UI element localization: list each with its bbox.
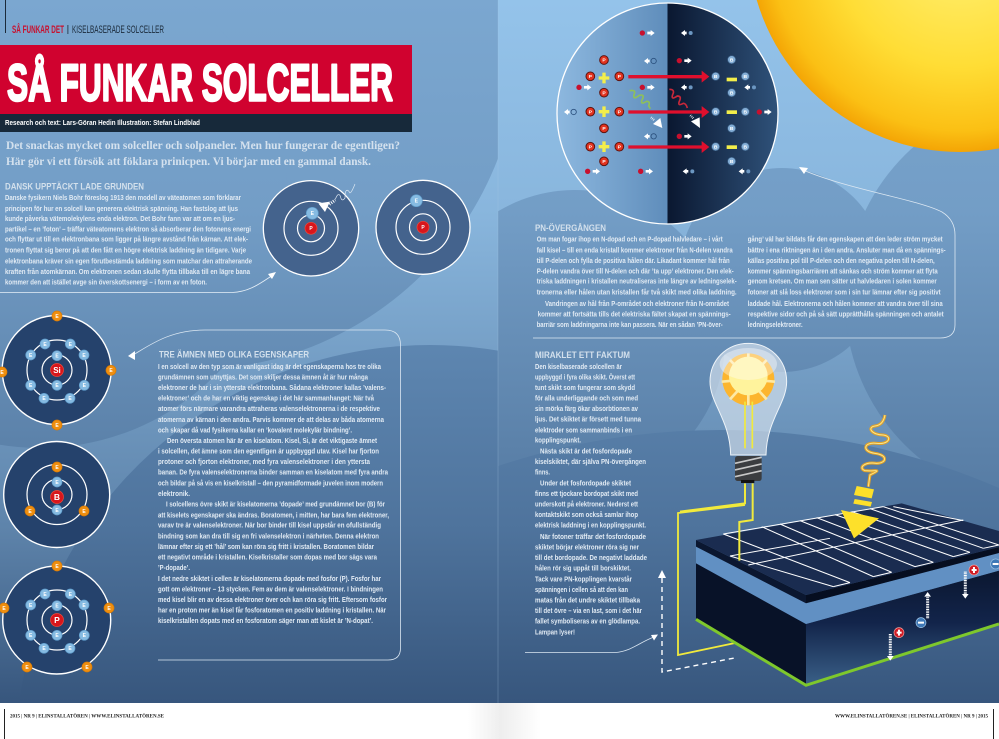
moving electrons: [576, 30, 772, 174]
B acceptor atoms: B: [744, 74, 748, 80]
text block: Tre ämnen: I det nedre skiktet i cellen är kiselatomerna dopade med fosfor (P). Fosfor har: [158, 574, 381, 583]
blue layer: [696, 547, 806, 624]
light bulb: [680, 343, 787, 512]
photon arrowheads: [651, 115, 700, 128]
text block: Dansk upptäckt: partikel – en ’foton’ – träffar väteatomens elektron så absorberar den fotonens energi: [5, 225, 251, 234]
B acceptor atoms: B: [714, 74, 718, 80]
P donor atoms: P: [589, 144, 593, 150]
text block: PN-övergången: kommer spänningsbarriären att sänkas och ström kommer att flyta: [748, 266, 938, 275]
arrow: Bohr text to atom: [0, 272, 276, 292]
text block: Tre ämnen: bindning som kan dra till sig en fri valenselektron i närheten. Denna elektron: [158, 531, 379, 540]
text block: Tre ämnen: atomerna av kärnan i den andra. Parvis kommer de att delas av båda atomerna: [158, 415, 385, 424]
byline bar: [0, 114, 412, 132]
text block: Tre ämnen: I solcellens övre skikt är kiselatomerna ’dopade’ med grundämnet bor (B) för: [166, 500, 385, 509]
text block: Dansk upptäckt: elektronbana kräver sin egen förutbestämda laddning som matchar den attraherande: [5, 256, 253, 265]
text block: Dansk upptäckt: principen för hur en solcell kan generera elektrisk spänning. Han fastslog att ljus: [5, 204, 238, 213]
intro text: Här gör vi ett försök att föklara prinicpen. Vi börjar med en gammal dansk.: [6, 154, 371, 168]
section tag: SÅ FUNKAR DET: [12, 23, 64, 36]
atom: phosphorus: E: [25, 665, 29, 671]
atom: phosphorus: E: [55, 633, 59, 639]
text block: Tre ämnen: elektronik.: [158, 489, 190, 498]
text block: Miraklet ett faktum: MIRAKLET ETT FAKTUM: [535, 350, 630, 361]
atom: phosphorus: E: [29, 633, 33, 639]
atom: phosphorus: E: [68, 646, 72, 652]
photon waves: [629, 89, 687, 109]
text block: PN-övergången: [535, 223, 946, 329]
atom: phosphorus: E: [69, 592, 73, 598]
P donor atoms: P: [618, 144, 622, 150]
text block: PN-övergången: PN-ÖVERGÅNGEN: [535, 223, 606, 234]
atom: phosphorus: P: [54, 615, 60, 625]
section tag: KISELBASERADE SOLCELLER: [72, 24, 164, 36]
P donor atoms: P: [589, 109, 593, 115]
solar cell block: [696, 483, 999, 685]
atom: phosphorus: E: [82, 603, 86, 609]
atom: phosphorus: E: [83, 633, 87, 639]
text block: Dansk upptäckt: kommer den att istället avge sin överskottsenergi – i form av en foton.: [5, 278, 207, 287]
atom: silicon: E: [68, 396, 72, 402]
panel outline: three substances: [128, 330, 400, 660]
wire to lamp: left circuit: [678, 505, 745, 655]
text block: PN-övergången: barriär som laddningarna inte kan passera. När en sådan ’PN-över-: [537, 320, 723, 329]
glow: [720, 348, 777, 405]
text block: Miraklet ett faktum: spänningen i cellen så att den kan: [535, 585, 628, 594]
dashed current arrow: [658, 570, 737, 672]
atom: hydrogen ground state: E: [415, 199, 419, 205]
glass: [710, 343, 787, 455]
B acceptor atoms: B: [730, 90, 734, 96]
text block: Miraklet ett faktum: hålen rör sig uppåt till borskiktet.: [535, 564, 631, 573]
text block: Dansk upptäckt: kunde påverka vätemolekylens enda elektron. Det Bohr fann var att om en ljus-: [5, 214, 235, 223]
green contact layer: [696, 619, 999, 685]
text block: Miraklet ett faktum: Lampan lyser!: [535, 627, 575, 636]
B acceptor atoms: B: [714, 109, 718, 115]
text block: Dansk upptäckt: DANSK UPPTÄCKT LADE GRUNDEN: [5, 182, 144, 192]
atom: phosphorus: E: [43, 592, 47, 598]
atom: silicon: E: [0, 370, 4, 376]
atom: silicon: E: [55, 423, 59, 429]
text block: Tre ämnen: att kiselets egenskaper ska ändras. Boratomen, i mitten, har bara fem elektroner,: [158, 510, 389, 519]
text block: Dansk upptäckt: och flyttar ut till en elektronbana som ligger på längre avstånd från kärnan. Att elek-: [5, 235, 248, 244]
atom: hydrogen excited by photon: E: [311, 211, 315, 217]
text block: PN-övergången: laddade hål. Elektronerna och hålen kommer att vandra över till sina: [748, 299, 943, 308]
text block: Miraklet ett faktum: Den kiselbaserade solcellen är: [535, 362, 622, 371]
B acceptor atoms: B: [744, 144, 748, 150]
text block: Dansk upptäckt: [5, 182, 253, 287]
atom: phosphorus: E: [85, 665, 89, 671]
text block: Tre ämnen: och skapar då vad fysikerna kallar en ’kovalent molekylär bindning’.: [158, 425, 352, 434]
text block: Miraklet ett faktum: underskott på elektroner. Nederst ett: [535, 500, 638, 509]
atom: boron: B: [54, 492, 60, 502]
P donor atoms: P: [602, 58, 606, 64]
text block: Miraklet ett faktum: elektroder som sammanbinds i en: [535, 425, 632, 434]
atom: hydrogen excited by photon: [263, 181, 359, 276]
B acceptor atoms: B: [714, 144, 718, 150]
atom: phosphorus: E: [55, 604, 59, 610]
text block: PN-övergången: bättre i ena riktningen än i den andra. Ansluter man då en spännings-: [748, 245, 946, 254]
atom: boron: E: [82, 509, 86, 515]
text block: Miraklet ett faktum: för alla underliggande och som med: [535, 394, 638, 403]
footer strip: 2015 | NR 9 | ELINSTALLATÖREN | WWW.ELINSTALLATÖREN.SE: [10, 712, 164, 720]
text block: Tre ämnen: banan. De fyra valenselektronerna binder samman en kiselatom med fyra andra: [158, 468, 389, 477]
text block: Miraklet ett faktum: fallet symboliseras av en glödlampa.: [535, 616, 640, 625]
atom: hydrogen ground state: [376, 180, 470, 274]
text block: Miraklet ett faktum: matas från det undre skiktet tillbaka: [535, 595, 641, 604]
text block: Miraklet ett faktum: uppbyggd i fyra olika skikt. Överst ett: [535, 372, 635, 381]
text block: Tre ämnen: varav tre är valenselektroner. När bor binder till kisel uppstår en ofullständig: [158, 521, 381, 530]
text block: Tre ämnen: och bildar på så vis en kiselkristall – den pyramidformade juvelen inom modern: [158, 479, 383, 488]
P donor atoms: P: [618, 74, 622, 80]
text block: Tre ämnen: grundämnen som utnyttjas. Det som skiljer dessa ämnen åt är hur många: [158, 373, 369, 382]
atom: phosphorus: [0, 561, 114, 674]
text block: PN-övergången: respektive sidor och på så sätt upprätthålla spänningen och antalet: [748, 309, 944, 318]
byline bar: Research och text: Lars-Göran Hedin Illustration: Stefan Lindblad: [5, 118, 200, 127]
text block: Miraklet ett faktum: tunt skikt som fungerar som skydd: [535, 383, 635, 392]
atom: silicon: E: [82, 353, 86, 359]
text block: PN-övergången: tronerna eller hålen utan kristallen får två skikt med olika laddning.: [537, 287, 737, 296]
text block: Miraklet ett faktum: Under det fosfordopade skiktet: [540, 479, 631, 488]
atom: boron: E: [55, 480, 59, 486]
atom: silicon: E: [55, 354, 59, 360]
text block: Miraklet ett faktum: kontaktskikt som också samlar ihop: [535, 510, 638, 519]
text block: PN-övergången: Om man fogar ihop en N-dopad och en P-dopad halvledare – i vårt: [537, 235, 723, 244]
B acceptor atoms: [712, 56, 749, 165]
text block: PN-övergången: ledningselektroner.: [748, 320, 803, 329]
text block: Miraklet ett faktum: När fotoner träffar det fosfordopade: [540, 532, 647, 541]
atom: silicon: [0, 311, 116, 430]
text block: Miraklet ett faktum: Tack vare PN-kopplingen kvarstår: [535, 574, 632, 583]
atom: boron: E: [28, 509, 32, 515]
text block: Tre ämnen: protoner och fjorton elektroner, med fyra valenselektroner i den yttersta: [158, 457, 371, 466]
filament wires: [745, 402, 752, 448]
text block: Tre ämnen: ’P-dopade’.: [158, 563, 190, 572]
text block: Tre ämnen: TRE ÄMNEN MED OLIKA EGENSKAPER: [159, 350, 309, 360]
P donor atoms: P: [618, 109, 622, 115]
text block: Tre ämnen: elektroner’ och de har en viktig egenskap i det här sammanhanget: När två: [158, 394, 375, 403]
text block: Tre ämnen: I en solcell av den typ som är vanligast idag är det egenskaperna hos tre olika: [158, 362, 382, 371]
top edge: [696, 540, 806, 603]
red junction arrows: [628, 71, 709, 153]
charge carriers: [887, 559, 999, 661]
text block: Miraklet ett faktum: kiselskiktet, där själva PN-övergången: [535, 457, 646, 466]
text block: PN-övergången: till P-delen och fylla de positiva hålen där. Likadant kommer hål från: [537, 256, 730, 265]
minus signs: [727, 78, 737, 149]
lower left face: [696, 563, 806, 685]
text block: Dansk upptäckt: Danske fysikern Niels Bohr föreslog 1913 den modell av väteatomen som förklarar: [5, 193, 241, 202]
section tag: [5, 0, 164, 36]
atom: hydrogen ground state: P: [421, 225, 425, 231]
text block: PN-övergången: P-delen vandra över till N-delen och där ’ta upp’ elektroner. Den elek-: [537, 266, 734, 275]
atom: phosphorus: E: [55, 564, 59, 570]
PN junction diagram: [557, 3, 778, 224]
B acceptor atoms: B: [730, 57, 734, 63]
P donor atoms: P: [589, 74, 593, 80]
text block: PN-övergången: kommer att fortsätta tills det elektriska fältet skapat en spännings-: [538, 309, 731, 318]
atom: phosphorus: E: [29, 603, 33, 609]
atom: boron: E: [55, 508, 59, 514]
atom: silicon: E: [29, 353, 33, 359]
atom: silicon: E: [55, 314, 59, 320]
footer strip: [0, 703, 999, 739]
text block: Tre ämnen: elektroner de har i sin yttersta elektronbana. Sådana elektroner kallas ’valens-: [158, 383, 386, 392]
text block: Tre ämnen: lämnar efter sig ett ’hål’ som kan röra sig fritt i kristallen. Boratomen bildar: [158, 542, 374, 551]
atom: silicon: E: [42, 396, 46, 402]
arrow: text to circuit: [525, 634, 658, 652]
text block: Miraklet ett faktum: Nästa skikt är det fosfordopade: [540, 447, 633, 456]
P donor atoms: [586, 56, 624, 166]
text block: Dansk upptäckt: kraften från atomkärnan. Om elektronen sedan skulle flytta tillbaka till en lägre bana: [5, 267, 251, 276]
B acceptor atoms: B: [730, 126, 734, 132]
text block: PN-övergången: källas positiva pol till P-delen och den negativa polen till N-delen,: [748, 256, 935, 265]
text block: PN-övergången: Vandringen av hål från P-området och elektroner från N-området: [545, 299, 729, 308]
text block: Tre ämnen: gott om elektroner – 13 stycken. Fem av dem är valenselektroner. I bindningen: [158, 585, 383, 594]
text block: Miraklet ett faktum: ljus. Det skiktet är försett med tunna: [535, 415, 642, 424]
arrow: sun to PN panel outline: [533, 167, 955, 338]
atom: boron: [4, 442, 110, 548]
atom: phosphorus: E: [42, 646, 46, 652]
text block: Miraklet ett faktum: finns ett tjockare bordopat skikt med: [535, 489, 638, 498]
atom: hydrogen excited by photon: P: [309, 226, 313, 232]
text block: Tre ämnen: i solcellen, det ämne som den egentligen är uppbyggd utav. Kisel har fjorton: [158, 446, 379, 455]
text block: Miraklet ett faktum: sin mörka färg ökar absorbtionen av: [535, 404, 639, 413]
B acceptor atoms: B: [730, 159, 734, 165]
footer strip: WWW.ELINSTALLATÖREN.SE | ELINSTALLATÖREN | NR 9 | 2015: [835, 712, 988, 720]
text block: Dansk upptäckt: tronen flyttat sig beror på att den fått en högre elektrisk laddning än tidigare. Varje: [5, 246, 247, 255]
text block: Miraklet ett faktum: kopplingspunkt.: [535, 436, 581, 445]
atom: phosphorus: E: [2, 606, 6, 612]
text block: Miraklet ett faktum: till det övre – via en last, som i det här: [535, 606, 642, 615]
atom: silicon: E: [43, 342, 47, 348]
title banner: [0, 45, 412, 114]
text block: Miraklet ett faktum: [535, 350, 648, 636]
atom: phosphorus: E: [107, 606, 111, 612]
atom: silicon: E: [29, 383, 33, 389]
photon arrow: [841, 415, 889, 538]
atom: silicon: E: [69, 342, 73, 348]
text block: Tre ämnen: ett negativt område i kristallen. Kiselkristaller som dopas med bor sägs vara: [158, 553, 378, 562]
text block: Tre ämnen: kiselkristallen dopats med en fosforatom säger man att kislet är ’N-dopat’.: [158, 616, 373, 625]
P donor atoms: P: [602, 159, 606, 165]
top surface: [696, 503, 999, 595]
text block: Tre ämnen: med kisel blir en av dessa elektroner över och kan röra sig fritt. Eftersom fosfor: [158, 595, 387, 604]
text block: Tre ämnen: atomer förs närmare varandra attraheras valenselektronerna i de respektive: [158, 404, 381, 413]
text block: Miraklet ett faktum: elektrisk laddning i en kopplingspunkt.: [535, 521, 646, 530]
title banner: SÅ FUNKAR SOLCELLER: [7, 54, 393, 112]
P donor atoms: P: [602, 126, 606, 132]
text block: PN-övergången: fall kisel – till en enda kristall kommer elektroner från N-delen vandra: [537, 245, 733, 254]
atom: silicon: E: [83, 383, 87, 389]
text block: PN-övergången: gång’ väl har bildats får den egenskapen att den leder ström mycket: [748, 235, 943, 244]
text block: Miraklet ett faktum: skiktet börjar elektroner röra sig ner: [535, 542, 639, 551]
electrode grid: [723, 507, 999, 587]
text block: PN-övergången: fotoner att slå loss elektroner som i sin tur lämnar efter sig positivt: [748, 287, 941, 296]
wire from lamp to grid: [739, 483, 753, 561]
atom: silicon: Si: [53, 366, 61, 375]
atom: silicon: E: [55, 383, 59, 389]
text block: PN-övergången: genom kretsen. Om man sen sätter ut halvledaren i solen kommer: [748, 277, 937, 286]
intro text: Det snackas mycket om solceller och solpaneler. Men hur fungerar de egentligen?: [6, 138, 400, 152]
P donor atoms: P: [602, 90, 606, 96]
B acceptor atoms: B: [744, 109, 748, 115]
intro text: [6, 138, 400, 168]
wire to circuit: [680, 483, 745, 512]
sun: [757, 0, 999, 152]
text block: Tre ämnen: har en proton mer än kisel får fosforatomen en positiv laddning i kristallen. När: [158, 606, 386, 615]
screw base: [735, 456, 762, 483]
atom: silicon: E: [109, 368, 113, 374]
text block: Tre ämnen: Den översta atomen här är en kiselatom. Kisel, Si, är det viktigaste ämnet: [167, 436, 377, 445]
text block: Miraklet ett faktum: finns.: [535, 468, 550, 477]
text block: Tre ämnen: [158, 350, 389, 625]
moving holes: [564, 30, 756, 174]
text block: PN-övergången: triska laddningen i kristallen neutraliseras inte längre av ledningselek-: [537, 277, 737, 286]
text block: Miraklet ett faktum: till det bordopade. De negativt laddade: [535, 553, 648, 562]
lower right face: [806, 571, 999, 685]
plus signs: [599, 73, 609, 152]
atom: boron: E: [55, 465, 59, 471]
